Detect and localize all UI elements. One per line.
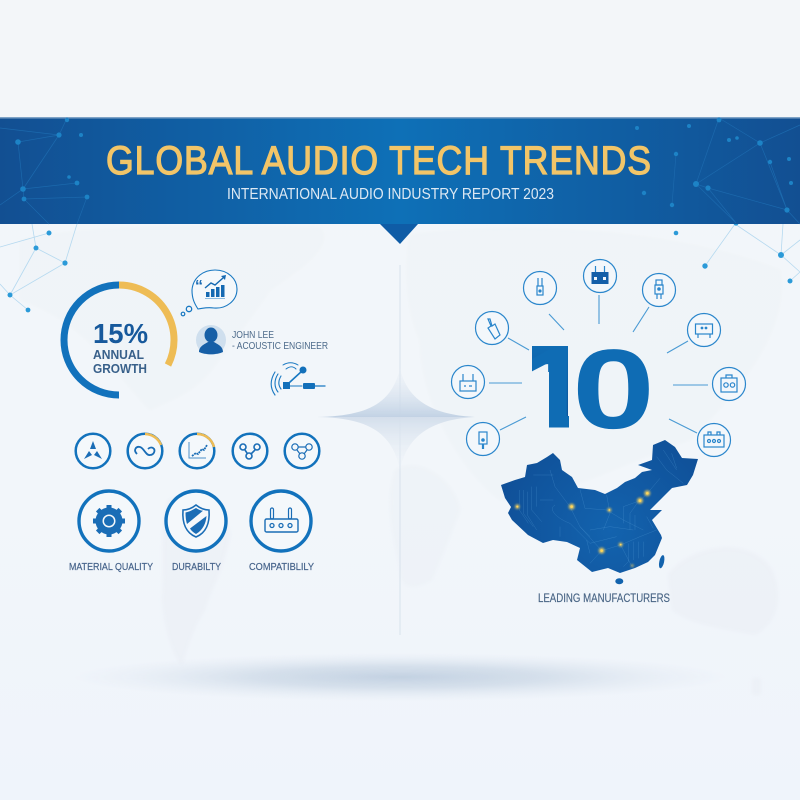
person name: JOHN LEE (232, 329, 274, 341)
subtitle: INTERNATIONAL AUDIO INDUSTRY REPORT 2023 (227, 186, 554, 203)
product icon 4 (688, 314, 720, 346)
small icon: infinity loop (128, 434, 162, 468)
manufacturer glow points (515, 490, 650, 567)
spoke lines (489, 295, 708, 433)
circuit lines (519, 450, 683, 567)
big number 10: 0 (572, 326, 655, 453)
vertical divider (399, 265, 401, 635)
big icon: shield (166, 491, 226, 551)
icon: wireless audio connector (271, 363, 325, 395)
small icon: network nodes (285, 434, 319, 468)
radial product icons (452, 260, 746, 456)
icon: thought bubble with chart: “ (195, 278, 203, 295)
hainan (615, 578, 623, 584)
label: durability: DURABILTY (172, 561, 221, 573)
title: GLOBAL AUDIO TECH TRENDS (106, 139, 652, 183)
china map (495, 435, 705, 584)
product icon 5 (712, 368, 746, 400)
banner (0, 117, 800, 244)
taiwan (658, 555, 665, 569)
label: compatibility: COMPATIBLILY (249, 561, 314, 573)
small icon: line chart (180, 434, 214, 468)
star divider ornament (317, 368, 475, 470)
product icon 3 (642, 274, 676, 306)
small icon row (76, 434, 319, 468)
banner network (0, 118, 800, 224)
small icon: triangle (76, 434, 110, 468)
growth ring (64, 285, 174, 395)
big icon: gear (79, 491, 139, 551)
product icon 7 (466, 422, 500, 456)
product icon 2 (584, 260, 616, 292)
big number 10: 1 (516, 326, 592, 452)
label: leading manufacturers: LEADING MANUFACTURERS (538, 593, 670, 605)
icon: person avatar (196, 325, 226, 355)
icon: thought bubble with chart (181, 270, 237, 316)
product icon 9 (476, 312, 508, 344)
product icon 6 (698, 424, 730, 456)
product icon 1 (524, 272, 556, 304)
person name: - ACOUSTIC ENGINEER (232, 340, 328, 352)
shadow (75, 653, 725, 701)
big number 10 (532, 346, 649, 430)
big icon: router (251, 491, 311, 551)
world map backdrop (20, 226, 781, 695)
growth label: ANNUAL (93, 347, 144, 362)
product icon 8 (452, 366, 484, 398)
label: material quality: MATERIAL QUALITY (69, 561, 153, 573)
growth label: GROWTH (93, 361, 147, 376)
small icon: linked nodes (233, 434, 267, 468)
growth value: 15% (93, 318, 148, 349)
network lines and nodes: lower background (0, 220, 800, 312)
